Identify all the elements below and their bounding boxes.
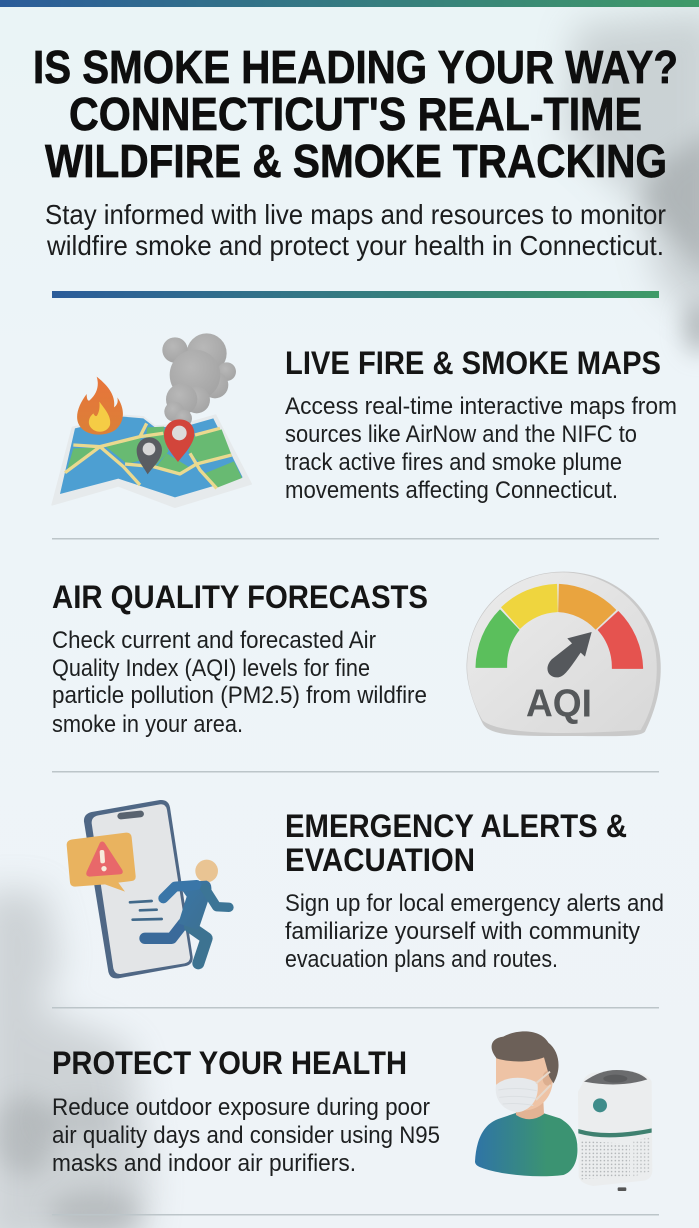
heading: LIVE FIRE & SMOKE MAPS <box>285 345 661 381</box>
icon: phone with alert and running person <box>67 800 229 978</box>
dark pin <box>137 437 162 474</box>
body text <box>52 1094 440 1177</box>
subtitle: Stay informed with live maps and resources to monitor <box>45 199 666 230</box>
flame <box>77 377 123 435</box>
body text: air quality days and consider using N95 <box>52 1122 440 1149</box>
smoke: bottom left <box>0 890 150 1228</box>
heading: AIR QUALITY FORECASTS <box>52 579 428 615</box>
body text: Access real-time interactive maps from <box>285 393 677 420</box>
purifier <box>578 1072 652 1186</box>
smoke: top right <box>565 10 699 354</box>
body text: Quality Index (AQI) levels for fine <box>52 655 370 682</box>
header divider bar <box>52 291 659 298</box>
body text: track active fires and smoke plume <box>285 449 622 476</box>
icon: map with fire and smoke <box>52 333 251 507</box>
motion lines <box>130 901 162 920</box>
panel: protect your health <box>52 1031 652 1191</box>
body text: movements affecting Connecticut. <box>285 477 618 504</box>
panel: air quality forecasts <box>52 572 661 738</box>
icon: person with mask and air purifier <box>475 1031 652 1191</box>
heading <box>285 808 627 878</box>
smoke plume <box>162 333 236 427</box>
body text <box>52 627 427 738</box>
panel: emergency alerts and evacuation <box>67 800 664 978</box>
body text: evacuation plans and routes. <box>285 946 558 973</box>
red pin <box>164 419 194 462</box>
top gradient bar <box>0 0 699 7</box>
body text: Sign up for local emergency alerts and <box>285 890 664 917</box>
icon: AQI gauge <box>466 572 661 736</box>
subtitle <box>45 199 666 261</box>
title: CONNECTICUT'S REAL-TIME <box>69 88 642 140</box>
person <box>475 1112 577 1176</box>
body text: familiarize yourself with community <box>285 918 640 945</box>
body text <box>285 393 677 504</box>
needle <box>547 632 592 677</box>
heading: PROTECT YOUR HEALTH <box>52 1045 407 1081</box>
body text: particle pollution (PM2.5) from wildfire <box>52 682 427 709</box>
body text <box>285 890 664 973</box>
body text: Check current and forecasted Air <box>52 627 376 654</box>
panel: live fire and smoke maps <box>52 333 677 507</box>
AQI label: AQI <box>526 682 592 726</box>
alert bubble <box>67 833 136 892</box>
body text: Reduce outdoor exposure during poor <box>52 1094 430 1121</box>
heading: EMERGENCY ALERTS & <box>285 808 627 844</box>
runner <box>195 860 218 882</box>
body text: sources like AirNow and the NIFC to <box>285 421 637 448</box>
body text: smoke in your area. <box>52 711 243 738</box>
heading: EVACUATION <box>285 842 475 878</box>
subtitle: wildfire smoke and protect your health in Connecticut. <box>46 230 664 261</box>
title <box>33 41 678 187</box>
body text: masks and indoor air purifiers. <box>52 1150 356 1177</box>
